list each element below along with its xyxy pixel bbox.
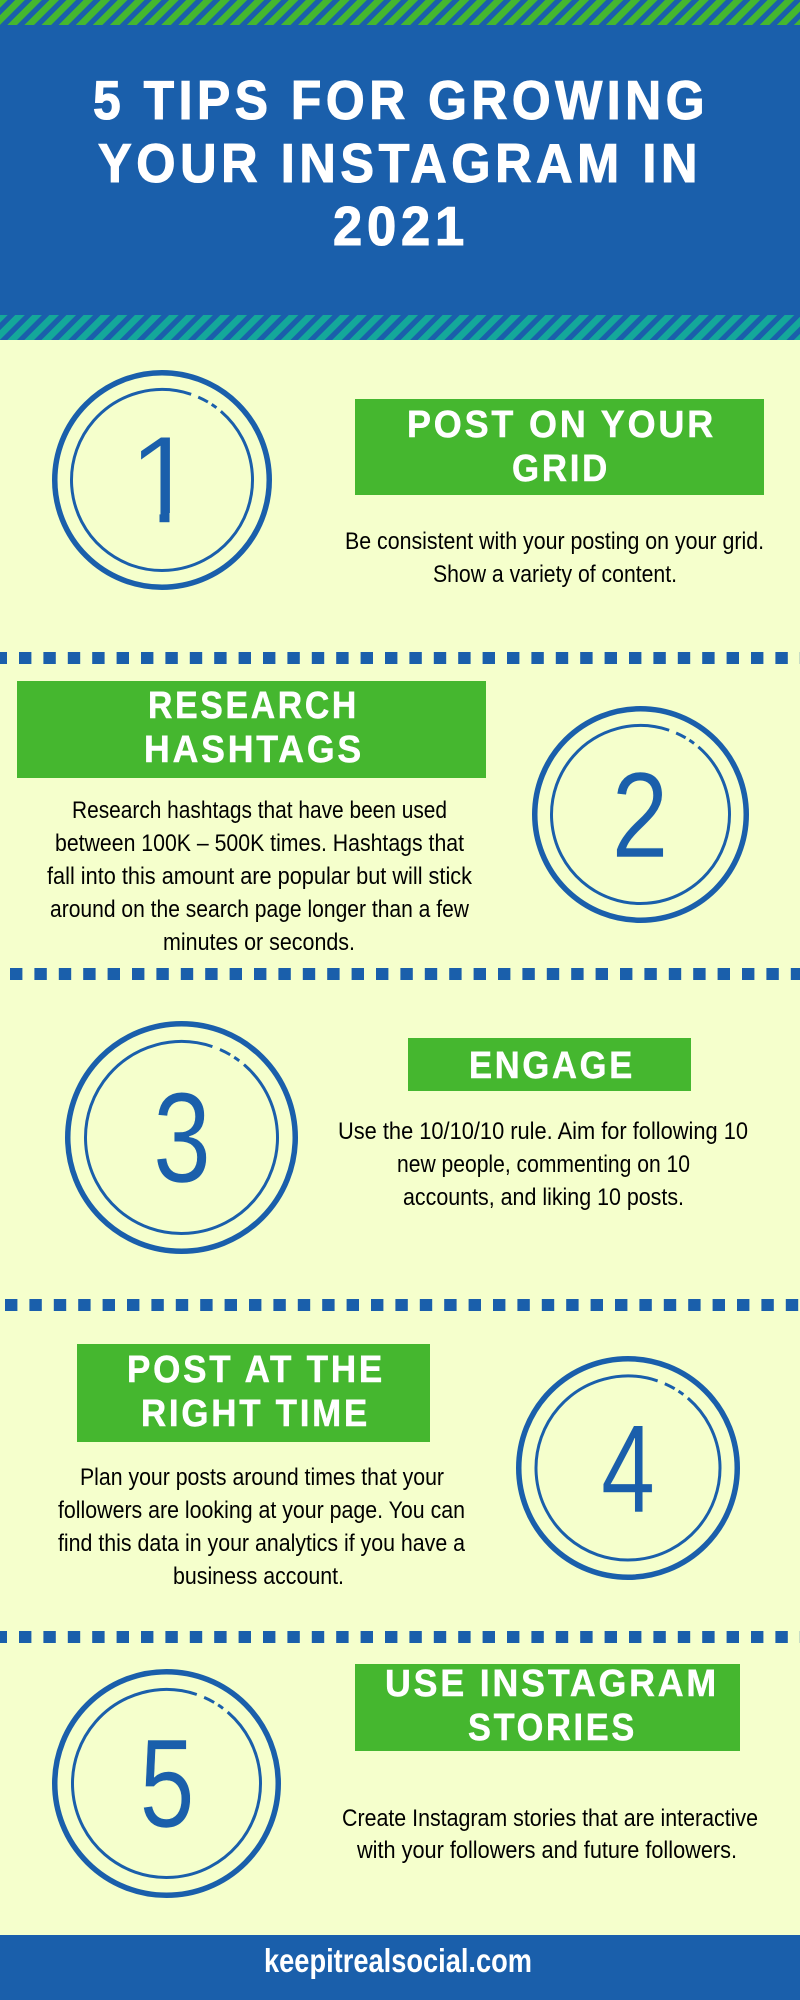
- top green striped band: [0, 0, 800, 25]
- heading: post on your grid: POST ON YOUR: [407, 404, 716, 446]
- bottom teal striped band: [0, 315, 800, 340]
- heading: research hashtags: RESEARCH: [148, 685, 359, 727]
- text block: tip 5 body: [342, 1805, 758, 1864]
- text block: tip 1 body: [345, 528, 764, 588]
- heading: engage: [408, 1038, 691, 1091]
- panel: tip 1: [52, 370, 764, 590]
- footer banner: [0, 1935, 800, 2000]
- icon: number 1 badge: [52, 370, 272, 590]
- title: YOUR INSTAGRAM IN: [98, 132, 702, 194]
- panel: tip 4: [58, 1338, 758, 1598]
- text block: tip 2 body: fall into this amount are popular but will stick: [47, 863, 473, 890]
- icon: number 5 badge: 5: [140, 1713, 194, 1854]
- footer banner: keepitrealsocial.com: [264, 1942, 532, 1979]
- text block: tip 3 body: new people, commenting on 10: [397, 1151, 690, 1178]
- title: 2021: [333, 195, 469, 257]
- heading: post on your grid: GRID: [512, 448, 610, 490]
- text block: tip 3 body: [338, 1118, 748, 1211]
- text block: tip 2 body: between 100K – 500K times. Hashtags that: [55, 830, 464, 857]
- icon: number 4 badge: [498, 1338, 758, 1598]
- heading: research hashtags: HASHTAGS: [144, 729, 364, 771]
- panel: tip 3: [46, 1002, 748, 1273]
- text block: tip 2 body: Research hashtags that have been used: [72, 797, 447, 824]
- text block: tip 3 body: accounts, and liking 10 posts.: [403, 1184, 684, 1211]
- icon: number 2 badge: [515, 689, 766, 940]
- heading: post at the right time: RIGHT TIME: [141, 1393, 370, 1435]
- heading: use instagram stories: [355, 1663, 740, 1751]
- text block: tip 5 body: Create Instagram stories that are interactive: [342, 1805, 758, 1832]
- text block: tip 4 body: followers are looking at your page. You can: [58, 1497, 465, 1524]
- text block: tip 4 body: Plan your posts around times that your: [80, 1464, 444, 1491]
- icon: number 3 badge: 3: [153, 1067, 211, 1210]
- panel: header banner: [0, 0, 800, 340]
- icon: number 2 badge: 2: [612, 747, 668, 883]
- text block: tip 3 body: Use the 10/10/10 rule. Aim for following 10: [338, 1118, 748, 1145]
- heading: engage: ENGAGE: [469, 1045, 635, 1087]
- heading: research hashtags: [17, 681, 486, 778]
- title: 5 TIPS FOR GROWING: [93, 69, 709, 131]
- icon: number 5 badge: [34, 1651, 299, 1916]
- heading: post on your grid: [355, 399, 764, 495]
- icon: number 4 badge: 4: [601, 1400, 655, 1539]
- heading: use instagram stories: STORIES: [468, 1707, 637, 1749]
- text block: tip 2 body: around on the search page longer than a few: [50, 896, 470, 923]
- text block: tip 1 body: Show a variety of content.: [433, 561, 677, 588]
- text block: tip 4 body: find this data in your analytics if you have a: [58, 1530, 466, 1557]
- text block: tip 4 body: [58, 1464, 466, 1590]
- title: [93, 69, 709, 257]
- heading: post at the right time: POST AT THE: [127, 1349, 385, 1391]
- text block: tip 2 body: [47, 797, 473, 956]
- text block: tip 5 body: with your followers and future followers.: [356, 1837, 737, 1864]
- text block: tip 4 body: business account.: [173, 1563, 344, 1590]
- icon: number 3 badge: [46, 1002, 317, 1273]
- text block: tip 2 body: minutes or seconds.: [163, 929, 355, 956]
- heading: use instagram stories: USE INSTAGRAM: [385, 1663, 719, 1705]
- panel: tip 2: [17, 681, 766, 956]
- icon: number 1 badge: 1: [128, 411, 198, 550]
- panel: tip 5: [34, 1651, 758, 1916]
- heading: post at the right time: [77, 1344, 430, 1442]
